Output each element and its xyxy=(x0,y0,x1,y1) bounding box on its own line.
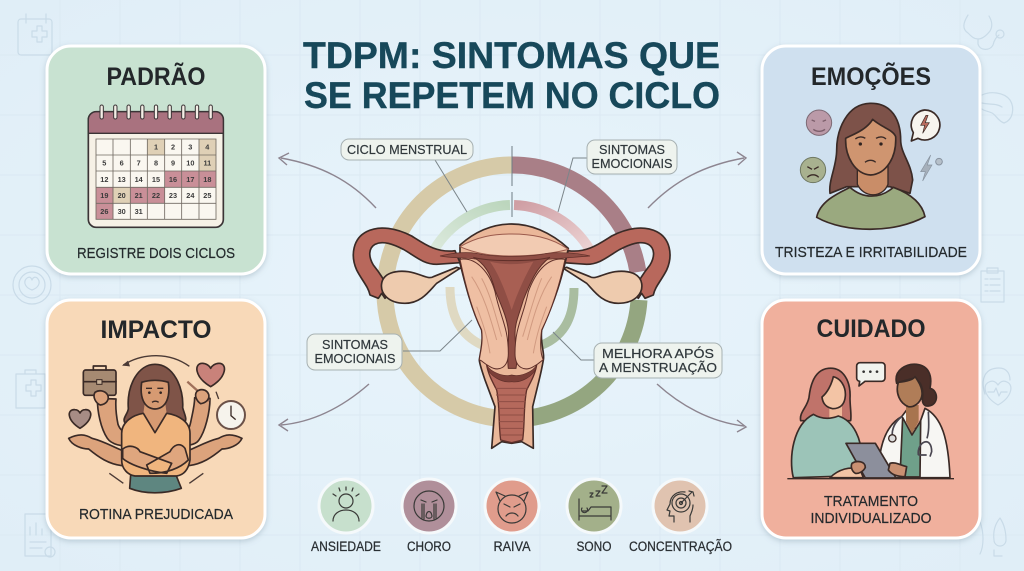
symptom: choro: CHORO xyxy=(407,539,451,554)
icon: calendar: 4 xyxy=(205,143,210,152)
icon: calendar: 20 xyxy=(118,191,126,200)
icon: calendar: 12 xyxy=(100,175,108,184)
uterus body xyxy=(440,224,590,448)
heading: emoções: EMOÇÕES xyxy=(811,61,931,91)
caption: cuidado: TRATAMENTO xyxy=(824,493,918,510)
icon: calendar: 2 xyxy=(171,143,175,152)
heading: cuidado: CUIDADO xyxy=(816,315,926,343)
icon: angry devil face xyxy=(496,492,528,523)
illustration: woman with many arms xyxy=(69,356,245,493)
symptom: ansiedade xyxy=(311,479,381,554)
icon: calendar: 30 xyxy=(118,207,126,216)
icon: calendar: 18 xyxy=(203,175,211,184)
arrow: to impacto xyxy=(279,384,369,431)
label: melhora após a menstruação xyxy=(594,343,722,378)
icon: calendar xyxy=(88,107,223,227)
label: sintomas emocionais (right): SINTOMAS xyxy=(599,142,665,157)
right fallopian tube xyxy=(563,228,670,298)
panel: impacto xyxy=(47,300,265,538)
title: SE REPETEM NO CICLO xyxy=(304,75,720,116)
arrow: to emoções xyxy=(648,152,746,208)
right ovary xyxy=(563,267,642,303)
label: sintomas emocionais (left) xyxy=(307,334,402,370)
illustration: sad woman with emotion icons xyxy=(800,103,942,229)
icon: calendar: 9 xyxy=(171,159,175,168)
left fallopian tube xyxy=(353,228,460,298)
icon: calendar: 23 xyxy=(169,191,177,200)
cycle ring xyxy=(385,146,639,419)
icon: calendar: 24 xyxy=(186,191,195,200)
label: melhora após a menstruação: A MENSTRUAÇÃO xyxy=(599,360,717,375)
icon: calendar: 8 xyxy=(154,159,158,168)
arrow: to padrão xyxy=(279,153,376,208)
icon: anxious person xyxy=(333,487,359,521)
symptom: raiva: RAIVA xyxy=(494,539,530,554)
icon: calendar: 7 xyxy=(137,159,141,168)
caption: emoções: TRISTEZA E IRRITABILIDADE xyxy=(775,244,967,261)
icon: calendar: 31 xyxy=(135,207,143,216)
illustration: patient and doctor xyxy=(787,363,954,479)
icon: calendar: 21 xyxy=(135,191,143,200)
label: melhora após a menstruação: MELHORA APÓS xyxy=(602,346,714,361)
caption: cuidado: INDIVIDUALIZADO xyxy=(810,510,932,527)
leader lines xyxy=(403,158,594,360)
caption: padrão: REGISTRE DOIS CICLOS xyxy=(77,245,235,262)
icon: calendar: 1 xyxy=(154,143,158,152)
title: TDPM: SINTOMAS QUE xyxy=(303,35,720,76)
icon: calendar: 14 xyxy=(135,175,144,184)
symptom: sono xyxy=(567,479,621,554)
panel: cuidado xyxy=(762,300,980,538)
arrow: to cuidado xyxy=(657,384,746,432)
label: sintomas emocionais (left): EMOCIONAIS xyxy=(314,351,396,366)
icon: crying face xyxy=(414,491,444,521)
symptom: ansiedade: ANSIEDADE xyxy=(311,539,381,554)
icon: calendar: 11 xyxy=(203,159,211,168)
symptom: concentração: CONCENTRAÇÃO xyxy=(629,539,732,554)
symptom: concentração xyxy=(629,479,732,554)
icon: calendar: 10 xyxy=(186,159,194,168)
icon: head with target xyxy=(667,491,694,522)
icon: calendar: 26 xyxy=(100,207,108,216)
label: ciclo menstrual: CICLO MENSTRUAL xyxy=(347,142,467,157)
icon: calendar: 19 xyxy=(100,191,108,200)
icon: calendar: 22 xyxy=(152,191,160,200)
vaginal canal xyxy=(487,365,537,443)
symptom: choro xyxy=(402,479,456,554)
label: ciclo menstrual xyxy=(341,139,473,160)
label: sintomas emocionais (right) xyxy=(587,140,677,174)
label: sintomas emocionais (right): EMOCIONAIS xyxy=(592,156,673,171)
icon: calendar: 6 xyxy=(120,159,124,168)
caption: impacto: ROTINA PREJUDICADA xyxy=(79,506,233,523)
symptom: raiva xyxy=(485,479,539,554)
symptom: sono: SONO xyxy=(576,539,612,554)
panel: emoções xyxy=(762,46,980,274)
icon: calendar: 3 xyxy=(188,143,192,152)
heading: padrão: PADRÃO xyxy=(106,61,206,91)
icon: calendar: 16 xyxy=(169,175,177,184)
caption: cuidado xyxy=(810,493,932,527)
icon: calendar: 5 xyxy=(102,159,106,168)
anatomical illustration: uterus xyxy=(353,224,670,448)
icon: calendar: 17 xyxy=(186,175,194,184)
label: sintomas emocionais (left): SINTOMAS xyxy=(322,337,388,352)
icon: calendar: 25 xyxy=(203,191,211,200)
heading: impacto: IMPACTO xyxy=(100,316,212,344)
panel: padrão xyxy=(47,46,265,274)
title xyxy=(303,35,720,116)
icon: calendar: 15 xyxy=(152,175,160,184)
left ovary xyxy=(381,267,460,303)
icon: calendar: 13 xyxy=(118,175,126,184)
icon: bed with zzz xyxy=(579,486,611,520)
